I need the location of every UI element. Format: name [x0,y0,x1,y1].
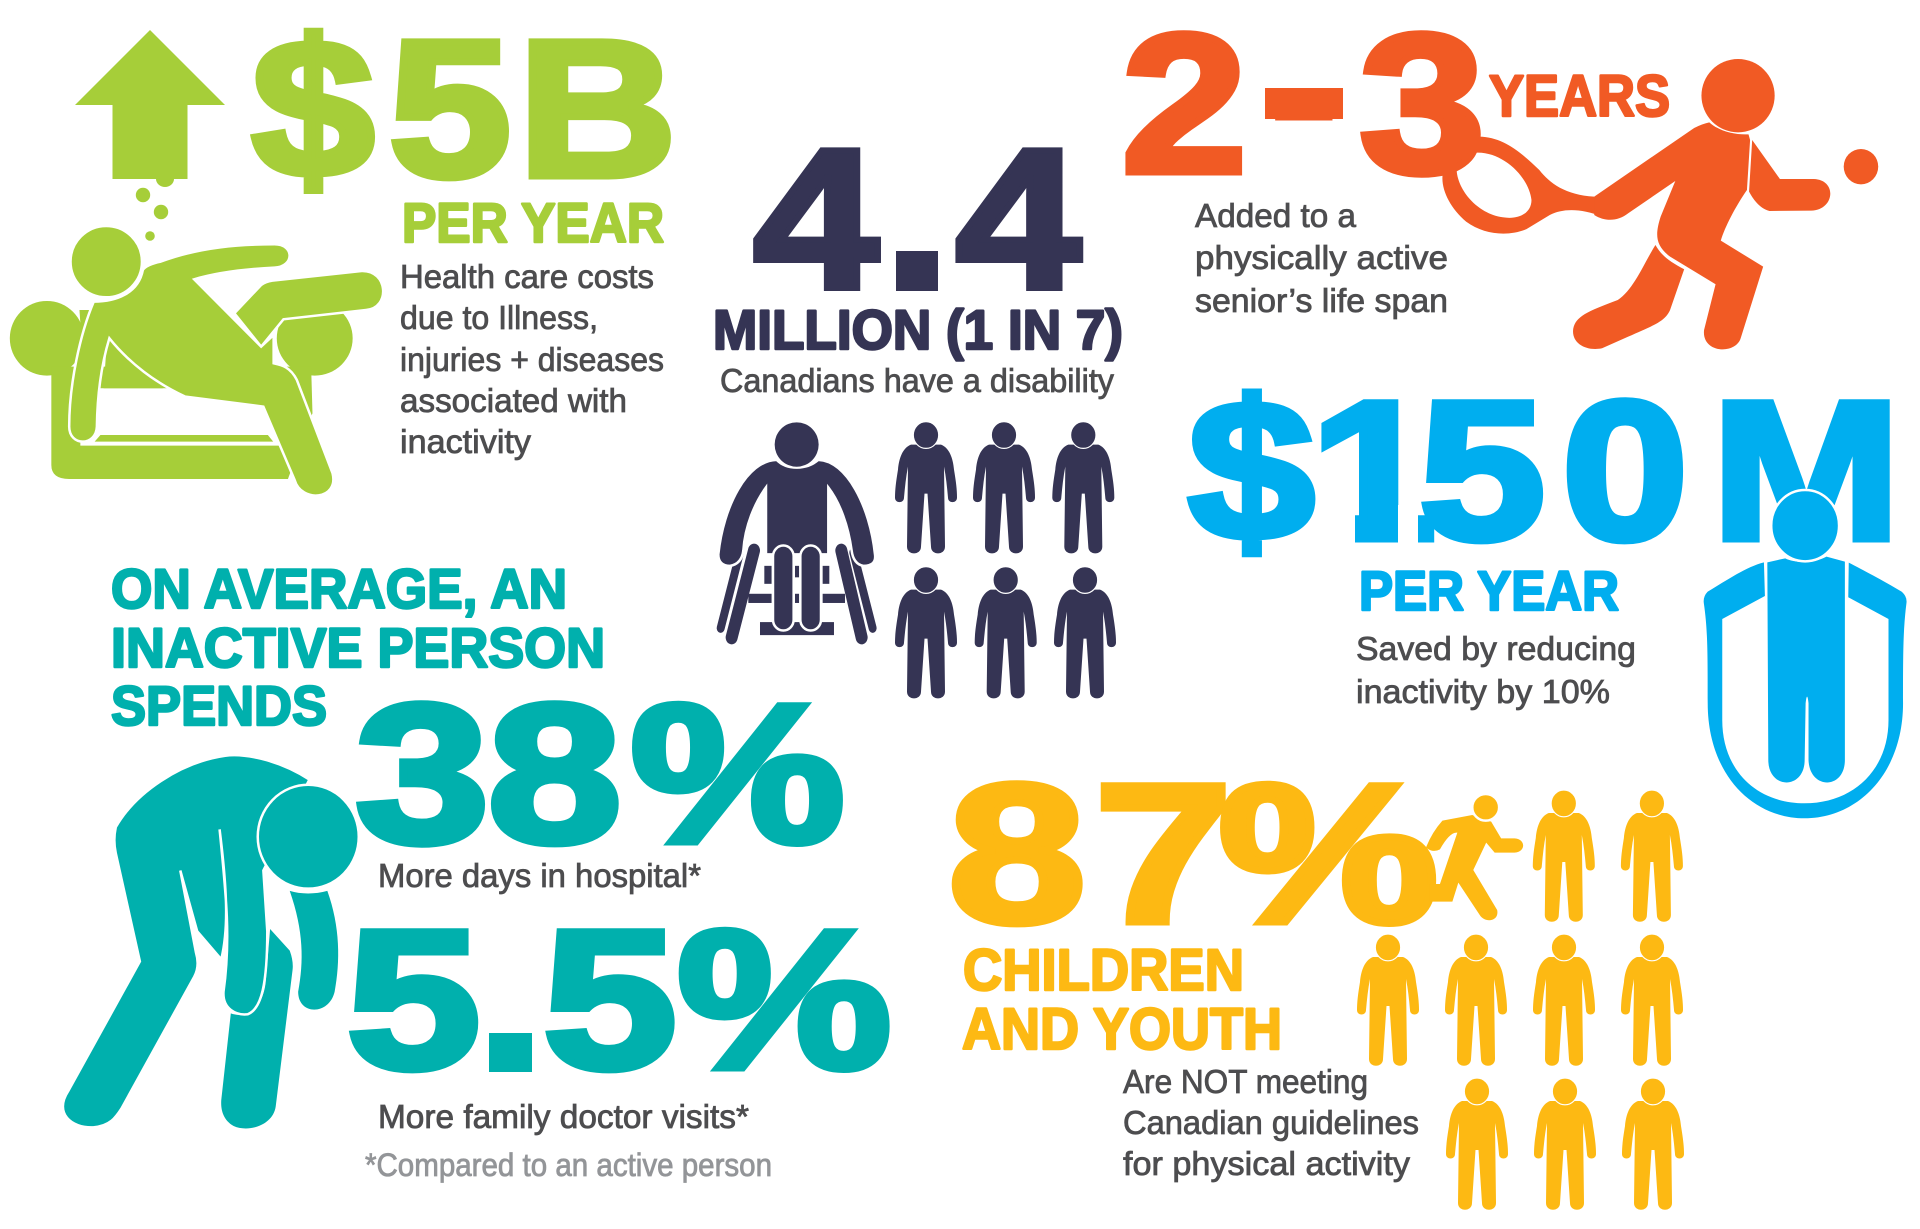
heading: on average an inactive person spends: SPENDS [111,674,327,737]
panel: savings from reducing inactivity [1188,361,1907,818]
text: added life span description: senior’s life span [1195,282,1448,319]
text: guidelines description: for physical activity [1123,1145,1411,1182]
heading: years: YEARS [1489,64,1670,129]
heading: children and youth [962,938,1282,1062]
panel: health care costs [10,1,677,496]
text: health care costs description: injuries + diseases [400,341,664,378]
icon: person slumped on couch [10,226,383,496]
stat: 87%: 87% [948,744,1438,964]
icon: person in wheelchair [718,422,875,637]
icon: person with skipping rope [1704,490,1907,818]
text: savings description: Saved by reducing [1356,630,1636,667]
footnote: *Compared to an active person [365,1147,772,1183]
stat: $5B: $5B [252,1,677,218]
heading: on average an inactive person spends: ON AVERAGE, AN [111,557,567,620]
heading: per year: PER YEAR [402,191,664,254]
text: added life span description: Added to a [1195,197,1357,234]
text: savings description: inactivity by 10% [1356,673,1610,710]
text: more family doctor visits: More family doctor visits* [378,1098,749,1135]
icon: tennis player [1442,59,1878,349]
icon: thought bubbles [136,188,168,241]
heading: children and youth: AND YOUTH [962,997,1282,1062]
heading: million (1 in 7): MILLION (1 IN 7) [713,298,1123,361]
heading: on average an inactive person spends: INACTIVE PERSON [111,616,605,679]
heading: children and youth: CHILDREN [963,938,1244,1003]
text: added life span description: physically active [1195,239,1448,276]
text: savings description [1356,630,1636,710]
text: Canadians have a disability: Canadians have a disability [720,362,1114,399]
text: health care costs description: inactivity [400,423,532,460]
text: guidelines description [1123,1063,1419,1182]
heading: on average an inactive person spends [111,557,605,737]
text: health care costs description: due to Illness, [400,299,598,336]
heading: per year: PER YEAR [1359,559,1619,622]
text: guidelines description: Are NOT meeting [1123,1063,1368,1100]
stat: 38%: 38% [355,663,845,884]
icons: ten standing children [1357,790,1684,1210]
panel: Canadians with a disability [713,108,1123,698]
icon: running child [1426,794,1523,920]
stat: 4.4: 4.4 [753,108,1081,331]
text: more days in hospital: More days in hospital* [378,857,701,894]
text: guidelines description: Canadian guidelines [1123,1104,1419,1141]
stat: $150M: $150M [1188,361,1901,582]
stat: 5.5%: 5.5% [346,889,892,1110]
panel: added life span [1122,0,1878,349]
icons: six standing people [895,422,1116,698]
panel: children and youth [948,744,1684,1210]
text: health care costs description: associated with [400,382,627,419]
text: health care costs description [400,258,664,460]
text: added life span description [1195,197,1448,319]
text: health care costs description: Health care costs [400,258,654,295]
icon: up arrow [75,30,225,187]
icon: person bent over [63,755,359,1128]
panel: inactive person health care use [63,557,892,1183]
